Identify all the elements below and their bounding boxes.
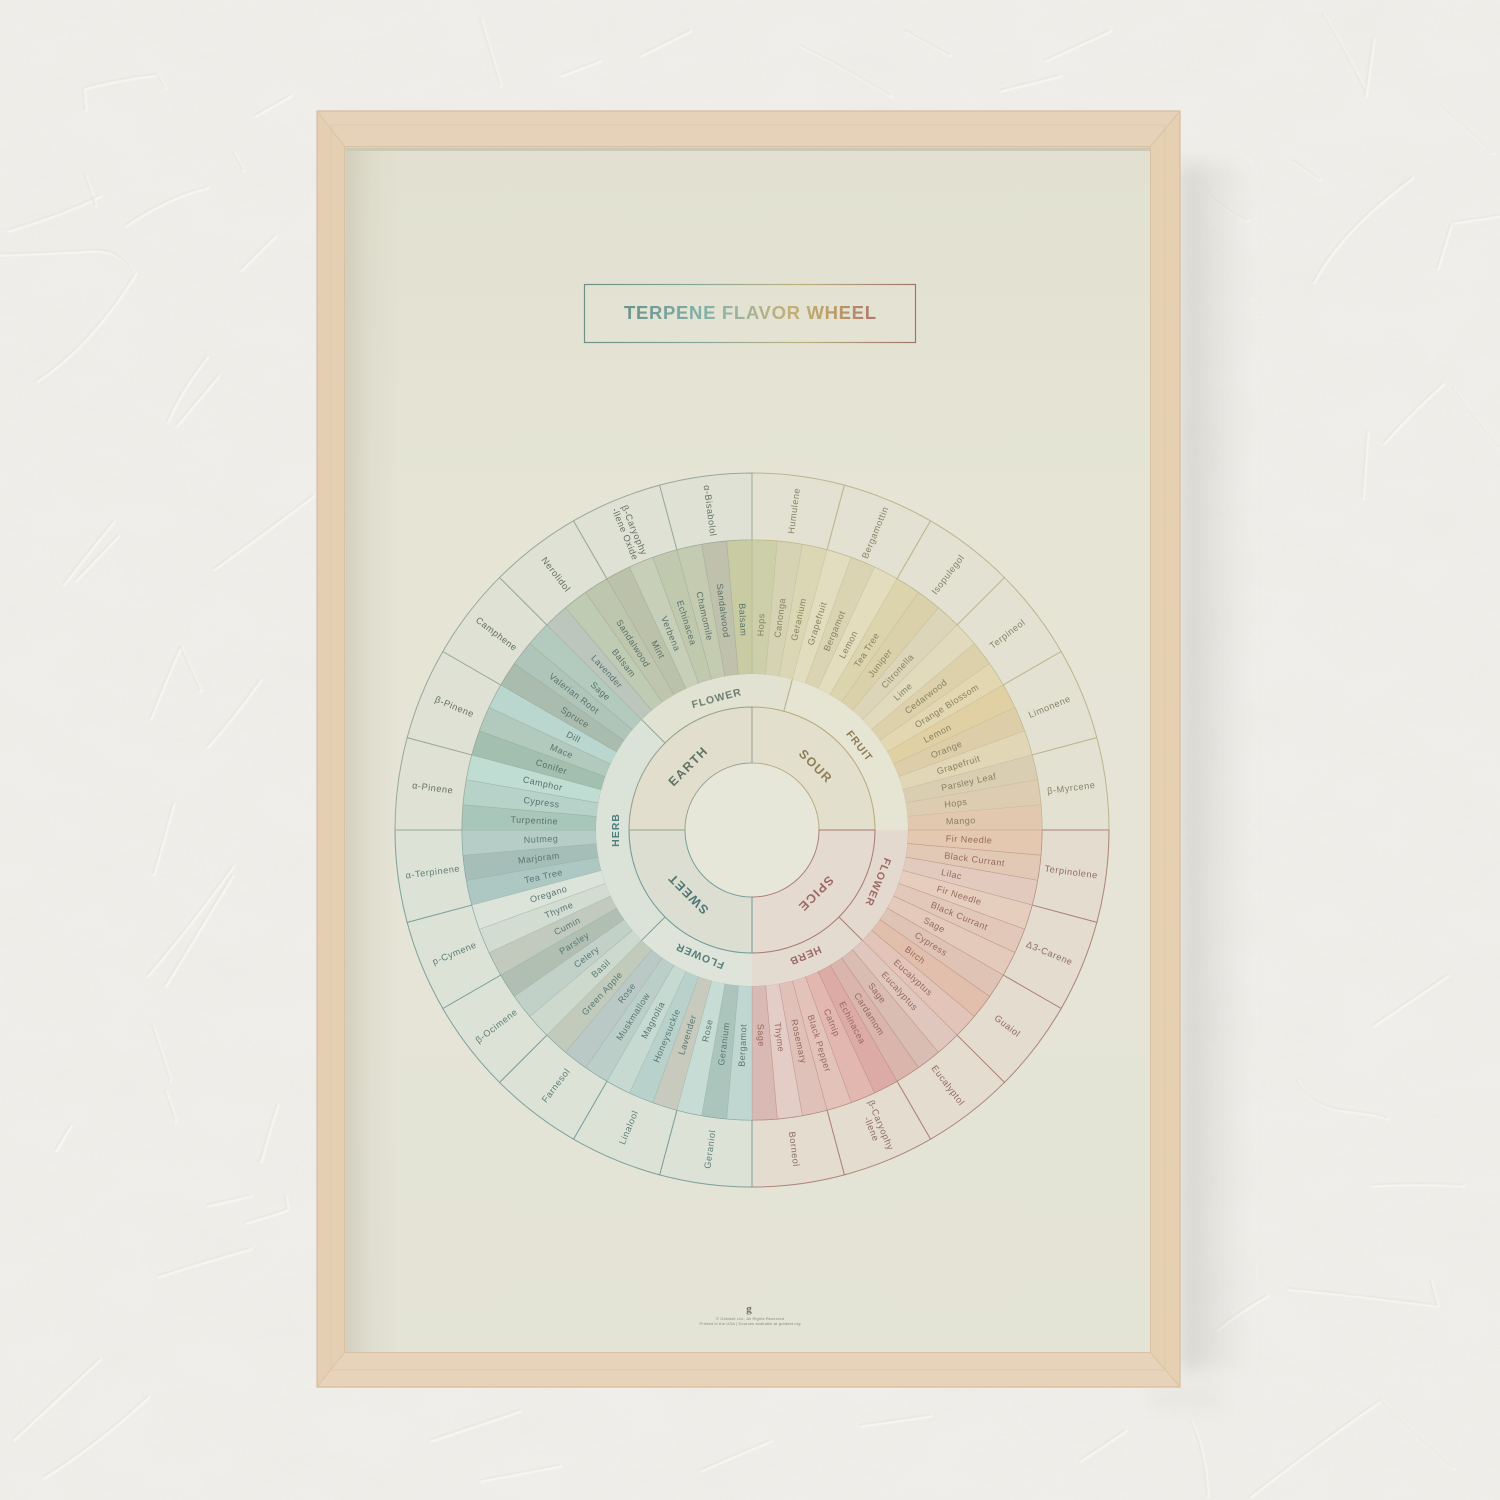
outer ring labels: terpene names: α-Bisabolol <box>702 484 718 537</box>
wedge labels: sour / fruit <box>755 597 997 827</box>
main ring labels: SWEET <box>665 870 712 917</box>
footer credits: © Gotdeet Ltd., All Rights Reserved <box>716 1316 784 1321</box>
wedge labels: sour / fruit: Grapefruit <box>936 753 981 776</box>
second ring labels: FLOWER <box>690 686 743 711</box>
wedge labels: spice: Sage <box>866 981 888 1005</box>
second ring labels: FLOWER <box>862 856 893 908</box>
wedge labels: spice: Fir Needle <box>946 833 993 845</box>
wedge labels: sour / fruit: Lemon <box>922 722 953 745</box>
wedge labels: sweet: Parsley <box>557 930 591 956</box>
wedge labels: sour / fruit: Citronella <box>879 652 916 690</box>
center hub <box>686 764 818 896</box>
wedge labels: sweet: Thyme <box>543 900 575 920</box>
flavor wheel <box>383 461 1121 1199</box>
wedge labels: earth: Spruce <box>559 705 591 730</box>
outer ring labels: terpene names: β-Caryophy <box>620 504 649 557</box>
wedge labels: spice: Eucalyptus <box>892 957 935 998</box>
outer ring labels: terpene names: p-Cymene <box>431 940 478 967</box>
outer ring labels: terpene names: Bergamottin <box>860 505 890 560</box>
wedge labels: earth: Sandalwood <box>715 583 732 638</box>
outer ring labels: terpene names: Limonene <box>1027 694 1072 720</box>
wedge labels: sweet: Oregano <box>529 884 568 905</box>
outer ring labels: terpene names: Borneol <box>787 1131 801 1168</box>
outer ring labels: terpene names: Geraniol <box>702 1129 717 1169</box>
outer ring labels: terpene names: -llene <box>862 1115 881 1143</box>
wedge labels: sour / fruit: Hops <box>944 797 968 810</box>
wedge labels: spice: Cypress <box>913 930 949 958</box>
outer ring labels: terpene names <box>405 484 1098 1169</box>
wedge labels: earth: Dill <box>565 729 582 745</box>
wedge labels: sweet: Green Apple <box>580 970 625 1017</box>
footer credits: Printed in the USA | Sources available at gotdeet.org <box>700 1321 800 1326</box>
main ring labels: EARTH <box>666 744 711 789</box>
second ring labels: HERB <box>610 813 622 847</box>
outer ring labels: terpene names: β-Ocimene <box>474 1007 519 1045</box>
outer ring labels: terpene names: Linalool <box>617 1109 640 1146</box>
wedge labels: sour / fruit: Juniper <box>866 647 894 679</box>
outer ring labels: terpene names: β-Caryophy <box>866 1099 896 1152</box>
wedge labels: sour / fruit: Lemon <box>837 629 860 660</box>
outer ring: terpene segments <box>383 461 1121 1199</box>
wedge labels: sour / fruit: Grapefruit <box>806 601 829 646</box>
wedge labels: spice <box>755 833 1006 1073</box>
main ring labels: SOUR <box>796 747 835 786</box>
wedge labels: spice: Cardamom <box>852 991 887 1037</box>
wedge labels: spice: Sage <box>922 915 947 935</box>
outer ring labels: terpene names: Camphene <box>474 615 519 653</box>
outer ring labels: terpene names: Eucalyptol <box>929 1063 967 1108</box>
wedge labels: sour / fruit: Geranium <box>789 597 808 642</box>
wedge labels: earth: Conifer <box>534 757 568 776</box>
wedge labels: spice: Rosemary <box>789 1018 809 1064</box>
frame cast shadow <box>1150 165 1250 1410</box>
wedge labels: sour / fruit: Canonga <box>772 597 788 638</box>
wedge labels: spice: Fir Needle <box>936 884 983 907</box>
wedge labels: earth: Balsam <box>610 647 638 679</box>
wedge labels: sweet: Magnolia <box>639 1000 667 1040</box>
title box <box>584 284 916 342</box>
main ring labels <box>665 744 836 917</box>
wedge labels: spice: Catnip <box>822 1007 842 1038</box>
wedge labels: sour / fruit: Hops <box>755 613 766 636</box>
wedge labels: earth: Verbena <box>659 615 682 653</box>
second ring labels: FLOWER <box>674 940 726 971</box>
footer credits: g <box>746 1303 752 1315</box>
outer ring labels: terpene names: α-Pinene <box>412 780 454 796</box>
wedge labels: spice: Black Currant <box>944 850 1006 868</box>
wedge labels: earth: Turpentine <box>510 814 558 827</box>
wedge labels: sour / fruit: Cedarwood <box>903 677 949 716</box>
outer ring labels: terpene names: Terpineol <box>988 617 1027 651</box>
outer ring labels: terpene names: Isopulegol <box>930 553 966 596</box>
wedge labels: sweet: Basil <box>589 957 612 980</box>
wedge labels: earth: Chamomile <box>694 591 715 642</box>
wedge labels: earth: Camphor <box>522 774 564 793</box>
wedge labels: sweet: Cumin <box>552 915 582 937</box>
wedge ring: spice quadrant <box>740 830 1042 1121</box>
wedge labels: sweet: Celery <box>572 944 601 970</box>
outer ring labels: terpene names: Terpinolene <box>1044 864 1098 880</box>
outer ring labels: terpene names: Guaiol <box>993 1013 1022 1039</box>
wedge labels: earth <box>510 583 749 827</box>
wedge labels: earth: Balsam <box>737 603 749 636</box>
outer ring labels: terpene names: β-Pinene <box>433 694 476 719</box>
wedge labels: sweet: Muskmallow <box>614 991 652 1042</box>
second ring labels: FRUIT <box>843 728 875 764</box>
wedge labels: sweet: Bergamot <box>737 1024 749 1067</box>
wedge labels: sweet: Honeysuckle <box>651 1007 682 1064</box>
wedge labels: earth: Sage <box>589 680 612 703</box>
wedge labels: earth: Mace <box>549 742 575 760</box>
wedge ring: sour / fruit quadrant <box>752 540 1043 842</box>
outer ring labels: terpene names: Farnesol <box>540 1066 572 1104</box>
wedge labels: sweet: Marjoram <box>517 850 560 866</box>
main ring: four base tastes <box>629 707 875 953</box>
footer credits <box>700 1303 800 1326</box>
wedge labels: sour / fruit: Orange <box>929 738 964 760</box>
wedge labels: sour / fruit: Mango <box>946 815 976 827</box>
wedge labels: earth: Cypress <box>523 795 560 810</box>
wedge labels: spice: Echinacea <box>837 1000 868 1046</box>
wedge labels: sour / fruit: Parsley Leaf <box>940 771 997 793</box>
wedge labels: spice: Birch <box>903 944 927 966</box>
main ring labels: SPICE <box>795 873 836 914</box>
second ring labels <box>610 686 893 971</box>
wedge labels: sweet: Lavender <box>676 1014 698 1056</box>
wedge labels: sweet: Geranium <box>716 1022 732 1066</box>
wedge labels: earth: Valerian Root <box>547 671 601 716</box>
wedge labels: sweet: Nutmeg <box>523 833 558 845</box>
wedge labels: earth: Echinacea <box>675 599 698 646</box>
wedge labels: sweet: Rose <box>616 981 638 1005</box>
title: TERPENE FLAVOR WHEEL <box>624 302 876 323</box>
wedge labels: spice: Black Pepper <box>806 1014 833 1073</box>
wedge labels: sour / fruit: Tea Tree <box>852 631 881 669</box>
wedge labels: spice: Thyme <box>772 1022 786 1053</box>
wedge labels: sweet <box>517 833 749 1067</box>
wedge labels: earth: Lavender <box>589 653 625 690</box>
wedge labels: spice: Eucalyptus <box>879 970 920 1013</box>
outer ring labels: terpene names: Δ3-Carene <box>1025 939 1074 967</box>
wedge labels: sweet: Tea Tree <box>523 867 564 885</box>
wooden frame <box>317 111 1180 1387</box>
outer ring labels: terpene names: Nerolidol <box>539 555 572 594</box>
wedge labels: earth: Sandalwood <box>614 618 652 669</box>
wedge labels: sweet: Rose <box>700 1018 715 1043</box>
wedge labels: sour / fruit: Orange Blossom <box>913 682 981 730</box>
second ring labels: HERB <box>787 943 823 967</box>
wedge labels: sour / fruit: Lime <box>892 681 914 703</box>
wedge labels: spice: Black Currant <box>929 900 990 932</box>
wedge ring: earth quadrant <box>462 539 764 830</box>
wedge labels: earth: Mint <box>649 639 667 660</box>
outer ring labels: terpene names: α-Terpinene <box>405 863 461 881</box>
outer ring labels: terpene names: -llene Oxide <box>610 506 640 562</box>
wedge ring: sweet quadrant <box>461 818 752 1120</box>
wedge labels: sour / fruit: Bergamot <box>822 609 847 653</box>
wedge labels: spice: Sage <box>755 1024 766 1047</box>
outer ring labels: terpene names: β-Myrcene <box>1047 780 1096 796</box>
second ring: category bands <box>596 674 908 986</box>
wedge labels: spice: Lilac <box>940 867 963 881</box>
outer ring labels: terpene names: Humulene <box>786 487 802 534</box>
poster paper <box>346 148 1150 1352</box>
